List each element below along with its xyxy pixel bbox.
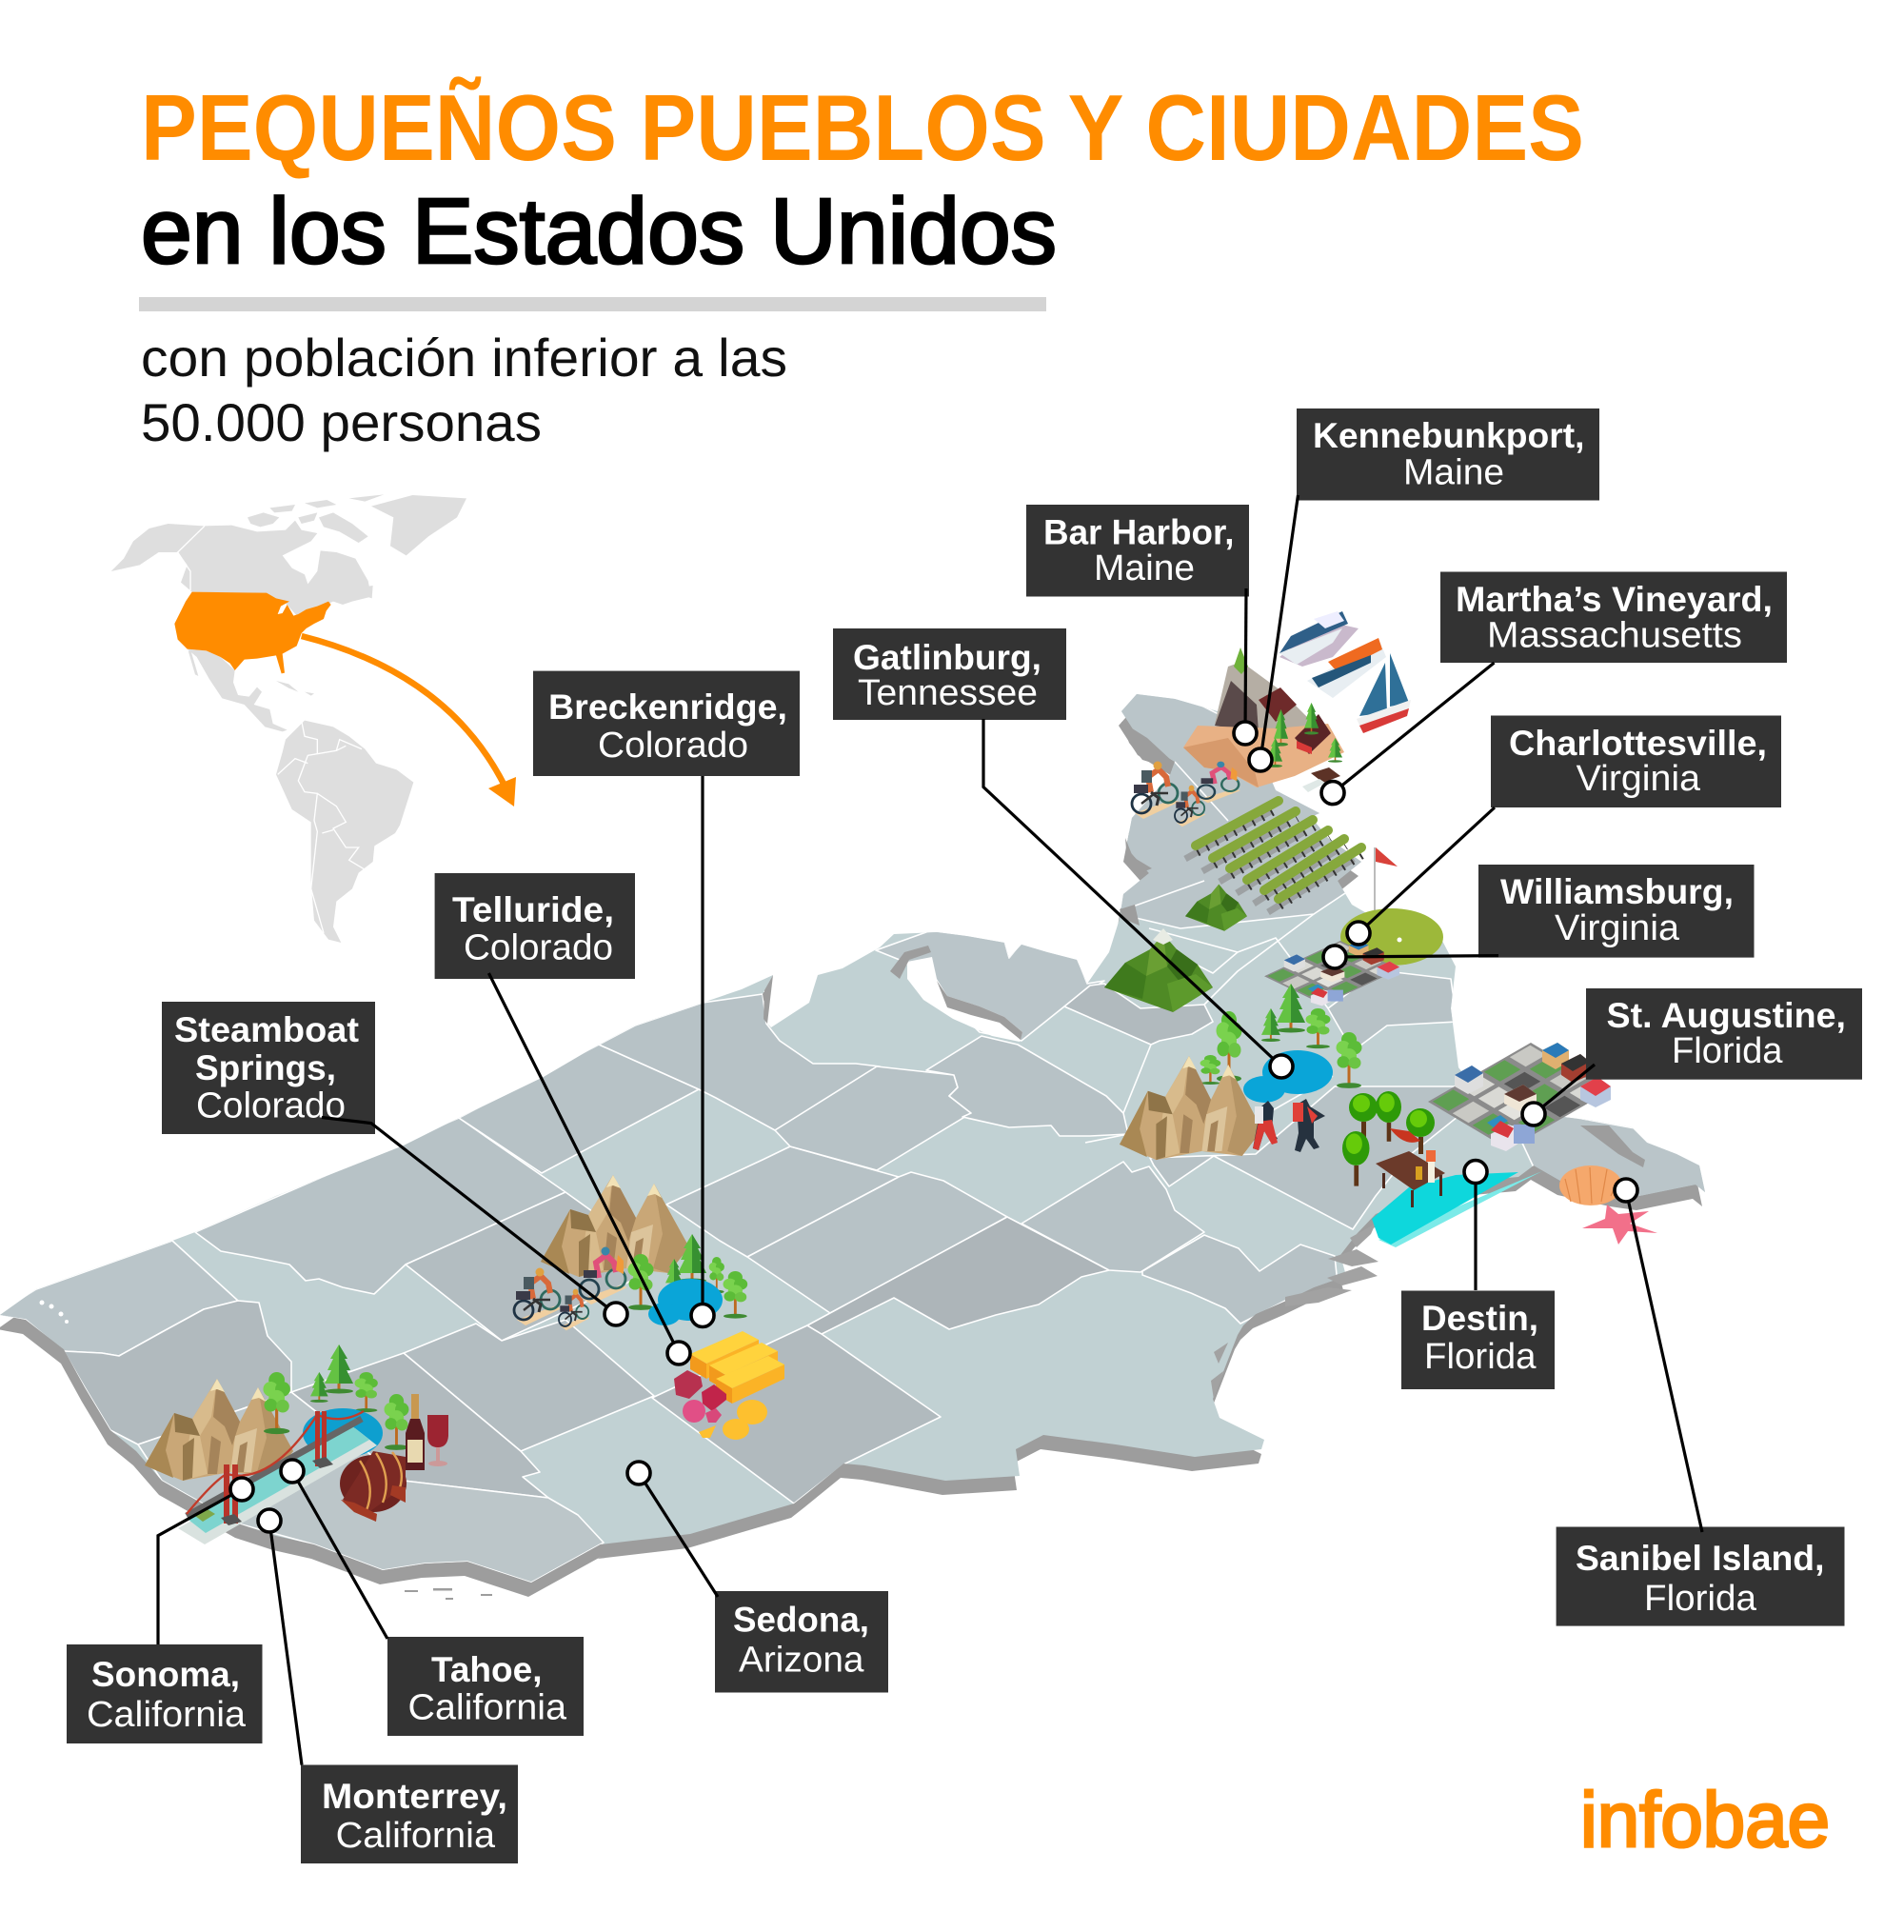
pin and leader: Telluride — [488, 973, 690, 1364]
subtitle — [141, 328, 787, 452]
icon: trees — [1200, 984, 1361, 1088]
label: Williamsburg: Virginia — [1555, 908, 1680, 948]
label: Bar Harbor: Maine — [1094, 548, 1195, 588]
icon: starfish — [1582, 1205, 1657, 1245]
icon: pine trees — [1268, 703, 1342, 767]
icon: gold bars — [690, 1331, 784, 1404]
label: Gatlinburg: Gatlinburg, — [853, 638, 1041, 677]
pin and leader: Sanibel Island — [1615, 1179, 1702, 1532]
icon: flag — [1374, 847, 1398, 920]
label: Tahoe: Tahoe, — [431, 1650, 543, 1689]
icon: wine barrel — [340, 1451, 407, 1522]
label: Martha's Vineyard — [1440, 571, 1787, 663]
pin and leader: Destin — [1464, 1161, 1487, 1290]
logo: infobae: infobae — [1580, 1777, 1830, 1863]
label: Monterrey — [301, 1765, 518, 1863]
label: Monterrey: California — [336, 1816, 496, 1856]
pin and leader: Sonoma — [158, 1478, 253, 1644]
subtitle: 50.000 personas — [141, 392, 542, 452]
label: St. Augustine: St. Augustine, — [1607, 996, 1846, 1035]
pin and leader: Tahoe — [281, 1460, 387, 1639]
icon: seagull — [1580, 1125, 1645, 1167]
icon: trees — [263, 1344, 408, 1450]
label: Sonoma: California — [87, 1695, 247, 1735]
label: Sanibel Island: Sanibel Island, — [1576, 1539, 1824, 1578]
icon: lake under bridge — [303, 1408, 383, 1458]
label: Monterrey: Monterrey, — [322, 1777, 507, 1816]
Lake Michigan — [907, 957, 1022, 1042]
icon: cyclists — [514, 1247, 627, 1330]
icon: sailboat — [1357, 653, 1411, 733]
icon: picnic bench and rowboat — [1302, 767, 1340, 792]
icons: Colorado cluster — [514, 1175, 784, 1440]
label: Charlottesville: Virginia — [1577, 759, 1701, 799]
pin and leader: Sedona — [627, 1462, 718, 1597]
icon: lake — [1243, 1050, 1333, 1103]
icon: pier — [1376, 1150, 1445, 1207]
icons: Tennessee cluster — [1120, 984, 1361, 1160]
label: Williamsburg — [1478, 865, 1754, 958]
icon: wine glass — [427, 1415, 448, 1466]
icon: cyclists — [1132, 762, 1240, 827]
icon: hikers — [1253, 1099, 1325, 1152]
icon: hammock — [1390, 1128, 1420, 1143]
pin and leader: Martha's Vineyard — [1321, 663, 1495, 805]
pin and leader: Gatlinburg — [983, 719, 1293, 1078]
icon: wine bottle — [406, 1394, 425, 1470]
icon: cyan water — [1372, 1171, 1542, 1247]
pin and leader: St. Augustine — [1522, 1065, 1595, 1125]
icon: trees — [1342, 1091, 1435, 1186]
icon: golf green — [1340, 908, 1443, 966]
icon: town Florida — [1428, 1043, 1611, 1151]
Pacific islands — [405, 1588, 492, 1600]
icon: gold nuggets — [699, 1400, 767, 1440]
highlighted United States — [174, 592, 331, 673]
pin and leader: Monterrey — [258, 1509, 302, 1765]
label: Steamboat Springs: Springs, — [195, 1048, 336, 1087]
icon: bridge — [178, 1411, 377, 1544]
label: Tahoe: California — [407, 1687, 567, 1727]
label: St. Augustine — [1586, 988, 1862, 1080]
label: Kennebunkport — [1297, 408, 1599, 501]
icon: ships — [1279, 611, 1386, 698]
icon: rubies — [674, 1370, 726, 1423]
icons: Maine cluster — [1132, 611, 1411, 827]
subtitle: con población inferior a las — [141, 328, 787, 388]
label: Steamboat Springs — [162, 1002, 375, 1134]
label: Sonoma — [67, 1644, 263, 1743]
label: Sanibel Island: Florida — [1644, 1579, 1757, 1619]
label: Kennebunkport: Kennebunkport, — [1313, 416, 1584, 455]
locator map: Americas — [111, 494, 466, 943]
icon: rocky mountain — [1215, 647, 1314, 733]
label: Destin — [1401, 1291, 1555, 1389]
pin and leader: Charlottesville — [1347, 807, 1495, 945]
label: Bar Harbor — [1026, 505, 1249, 596]
icon: houses — [1259, 687, 1331, 754]
icons: Destin cluster — [1342, 1091, 1542, 1247]
pin and leader: Kennebunkport — [1249, 495, 1299, 771]
label: Destin: Destin, — [1421, 1299, 1538, 1338]
icon: cliff — [1183, 724, 1344, 787]
icons: California cluster — [145, 1344, 448, 1544]
label: Steamboat Springs: Colorado — [196, 1086, 346, 1125]
label: Telluride: Telluride, — [452, 890, 614, 929]
label: Sanibel Island — [1557, 1527, 1845, 1626]
icon: town Virginia — [1264, 941, 1399, 1006]
St Lawrence shadow — [1121, 722, 1173, 767]
pin and leader: Williamsburg — [1323, 946, 1498, 968]
label: Steamboat Springs: Steamboat — [174, 1010, 359, 1049]
Gulf coast marsh — [1211, 1224, 1378, 1400]
label: Breckenridge: Colorado — [598, 726, 748, 766]
icon: mountains — [541, 1175, 689, 1277]
title line 1: PEQUEÑOS PUEBLOS Y CIUDADES — [141, 75, 1584, 180]
label: Breckenridge: Breckenridge, — [548, 687, 787, 727]
map: United States — [0, 686, 1714, 1600]
icon: mountains — [1120, 1056, 1262, 1160]
icon: lake — [648, 1279, 723, 1325]
label: Gatlinburg — [833, 628, 1066, 720]
Puget Sound detail — [40, 1301, 69, 1324]
title — [141, 75, 1584, 283]
icon: mountains — [145, 1379, 293, 1481]
label: Sedona: Sedona, — [733, 1601, 869, 1640]
icon: scallop shell — [1559, 1165, 1622, 1205]
label: Telluride: Colorado — [464, 928, 613, 968]
Lake Erie notch shadow — [764, 975, 773, 1024]
pin and leader: Bar Harbor — [1234, 588, 1257, 745]
label: Telluride — [435, 873, 635, 979]
arrow: from USA to detail map — [302, 636, 516, 807]
label: Sedona: Arizona — [739, 1640, 864, 1680]
label: Kennebunkport: Maine — [1403, 453, 1504, 493]
label: Williamsburg: Williamsburg, — [1500, 872, 1734, 911]
label: Sedona — [715, 1591, 888, 1693]
label: St. Augustine: Florida — [1672, 1031, 1783, 1071]
pin and leader: Steamboat Springs — [322, 1118, 627, 1325]
icon: vineyard — [1185, 801, 1363, 912]
title rule — [139, 297, 1046, 311]
title line 2: en los Estados Unidos — [141, 179, 1057, 283]
label: Destin: Florida — [1424, 1337, 1537, 1377]
label: Sonoma: Sonoma, — [91, 1655, 240, 1694]
label: Martha's Vineyard: Massachusetts — [1487, 616, 1742, 656]
pin and leader: Breckenridge — [691, 776, 714, 1327]
icon: green mountains — [1104, 885, 1247, 1012]
label: Breckenridge — [533, 671, 800, 776]
label: Gatlinburg: Tennessee — [858, 673, 1038, 713]
label: Bar Harbor: Bar Harbor, — [1043, 512, 1234, 551]
icon: trees — [628, 1234, 747, 1319]
label: Tahoe — [387, 1637, 584, 1736]
label: Charlottesville: Charlottesville, — [1509, 724, 1767, 763]
label: Martha's Vineyard: Martha’s Vineyard, — [1456, 580, 1773, 619]
label: Charlottesville — [1491, 716, 1781, 807]
